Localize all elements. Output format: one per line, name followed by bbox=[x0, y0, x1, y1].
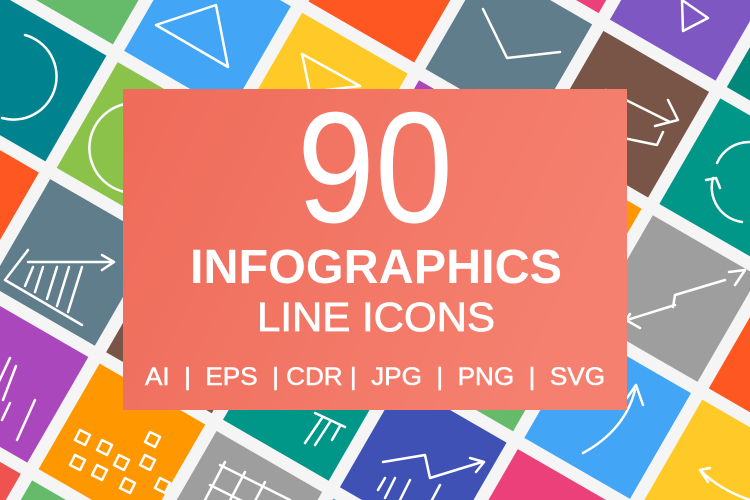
title panel bbox=[123, 80, 627, 410]
icon: teal lines bbox=[305, 413, 345, 445]
icon: table grid bbox=[205, 462, 290, 500]
icon: checkmark bbox=[483, 9, 560, 58]
icon: circle green bbox=[88, 103, 123, 193]
icon: circle arrows bbox=[706, 142, 750, 222]
icon: curve arrow yellow bbox=[700, 468, 750, 500]
heading: 90: 90 bbox=[297, 80, 453, 256]
icon: bar chart arrow bbox=[5, 250, 114, 325]
icon: triangle bbox=[156, 5, 228, 67]
icon: bars purple bbox=[0, 358, 35, 440]
text: file formats: AI | EPS | CDR | JPG | PNG | SVG bbox=[145, 363, 605, 391]
heading: INFOGRAPHICS: INFOGRAPHICS bbox=[190, 241, 562, 294]
subheading: LINE ICONS: LINE ICONS bbox=[257, 294, 495, 340]
icon: triangle purple bbox=[682, 0, 708, 31]
icon: arc teal bbox=[2, 35, 57, 120]
icon: chart line indigo bbox=[378, 455, 484, 500]
icon: curve arrow bbox=[583, 385, 643, 453]
icon: diagonal arrows bbox=[626, 270, 745, 328]
icon: triangle yellow bbox=[302, 54, 360, 92]
icon: loop arrow bbox=[605, 88, 680, 146]
icon: calendar grid bbox=[70, 430, 170, 493]
